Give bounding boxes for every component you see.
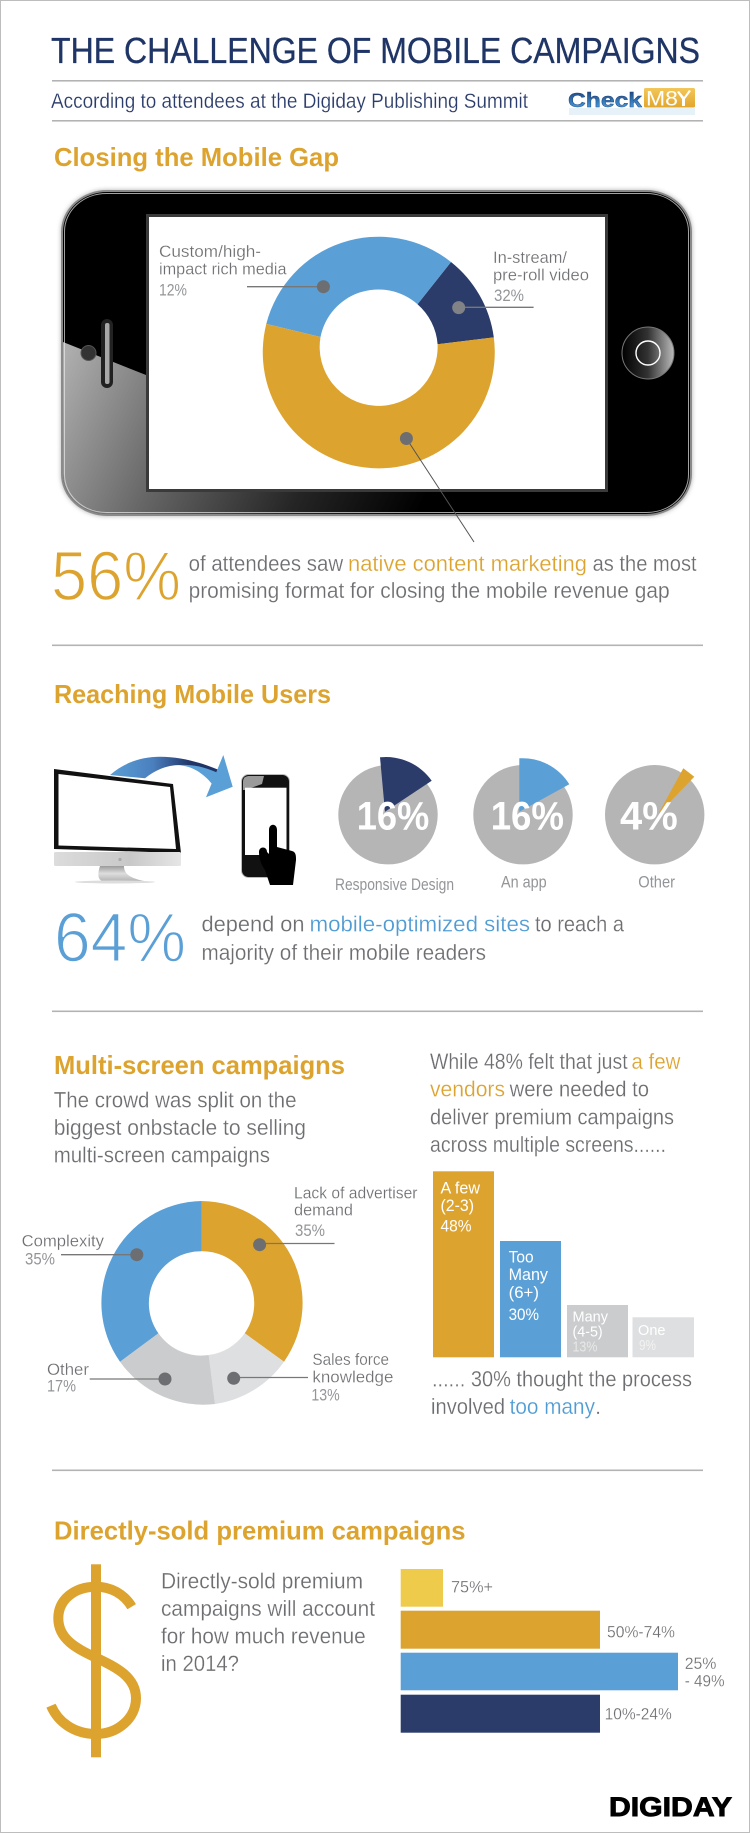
bar: 25%-49%: - 49%	[685, 1672, 725, 1691]
text: crowd was split	[54, 1088, 306, 1168]
bar: too many	[500, 1241, 561, 1357]
text: 48% a few vendors: a few	[632, 1049, 680, 1074]
bar: too many: (6+)	[509, 1283, 539, 1302]
label: custom rich media	[159, 242, 287, 300]
label: complexity: Complexity	[22, 1232, 104, 1251]
bar: 25%-49%: 25%	[685, 1654, 716, 1673]
label: custom rich media: Custom/high-	[159, 242, 261, 261]
phone speaker	[101, 319, 113, 388]
logo: CheckM8: M8	[646, 88, 678, 110]
pie: other 4%	[605, 765, 704, 891]
label: lack of advertiser demand: demand	[294, 1201, 353, 1220]
label: complexity: 35%	[25, 1249, 55, 1268]
bar: a few: A few	[440, 1178, 481, 1197]
stat: 56% native content: as the most	[593, 551, 697, 576]
text: 48% a few vendors: were needed to	[509, 1077, 649, 1102]
text: revenue question	[161, 1568, 375, 1676]
text: 30% too many: involved	[431, 1394, 505, 1419]
bar: 10%-24%: 10%-24%	[605, 1704, 672, 1723]
text: 48% a few vendors: deliver premium campaigns	[430, 1104, 674, 1129]
bar chart: premium revenue share	[401, 1569, 725, 1733]
label: in-stream video: pre-roll video	[493, 266, 589, 285]
label: custom rich media: 12%	[159, 280, 187, 300]
bar: many	[567, 1305, 628, 1357]
subtitle: According to attendees at the Digiday Publishing Summit	[51, 90, 528, 113]
label: lack of advertiser demand	[294, 1183, 418, 1240]
text: revenue question: campaigns will account	[161, 1596, 375, 1621]
bar: many: (4-5)	[572, 1324, 603, 1341]
pie: responsive design 16%: 16%	[357, 794, 429, 838]
logo: CheckM8: Check	[568, 90, 643, 112]
bar: too many: Many	[509, 1265, 548, 1284]
heading: Reaching Mobile Users: Reaching Mobile Users	[54, 679, 331, 709]
stat: 64% mobile-optimized: to reach a	[535, 912, 625, 937]
pie: other 4%: Other	[638, 872, 675, 891]
bar: 10%-24%	[401, 1695, 672, 1733]
pie: responsive design 16%	[335, 757, 454, 894]
panel: phone with donut chart	[61, 190, 692, 542]
label: other	[47, 1360, 89, 1396]
bar: many: 13%	[572, 1339, 597, 1356]
heading: Closing the Mobile Gap: Closing the Mobile Gap	[54, 142, 339, 172]
stat: 56% native content: of attendees saw	[189, 551, 343, 576]
text: 48% a few vendors: While 48% felt that just	[430, 1049, 628, 1074]
pie: other 4%: 4%	[620, 794, 678, 838]
donut chart: obstacles	[61, 1201, 334, 1405]
icon: smartphone with hand	[242, 774, 296, 885]
label: in-stream video: In-stream/	[493, 248, 567, 267]
stat: 56% native content: promising format for closing the mobile revenue gap	[189, 578, 670, 603]
label: in-stream video: 32%	[494, 286, 524, 305]
bar: one: One	[638, 1322, 666, 1339]
bar: 75%+: 75%+	[451, 1578, 493, 1597]
label: other: 17%	[47, 1377, 76, 1396]
stat: 56% native content: 56%	[51, 537, 181, 615]
bar: 25%-49%	[401, 1653, 725, 1691]
bar chart: number of vendors	[433, 1171, 694, 1357]
heading: Multi-screen campaigns: Multi-screen campaigns	[54, 1050, 345, 1080]
pie: an app 16%: 16%	[491, 794, 564, 838]
text: 48% a few vendors	[430, 1049, 680, 1157]
bar: one: 9%	[639, 1337, 656, 1354]
text: 30% too many: .	[595, 1394, 601, 1419]
arrow: desktop to mobile	[110, 755, 233, 797]
bar: one	[632, 1317, 694, 1357]
text: crowd was split: multi-screen campaigns	[54, 1143, 270, 1168]
pie: an app 16%	[473, 758, 573, 891]
pie: an app 16%: An app	[501, 872, 547, 891]
label: sales force knowledge: 13%	[311, 1386, 340, 1405]
heading: Directly-sold premium campaigns: Directly-sold premium campaigns	[54, 1515, 466, 1545]
label: custom rich media: impact rich media	[159, 260, 287, 278]
text: 30% too many	[431, 1367, 692, 1419]
label: sales force knowledge	[311, 1350, 393, 1405]
bar: too many: Too	[509, 1248, 534, 1267]
label: lack of advertiser demand: 35%	[295, 1221, 325, 1240]
label: in-stream video	[493, 248, 589, 305]
bar: 75%+	[401, 1569, 493, 1607]
stat: 64% mobile-optimized: 64%	[54, 899, 186, 977]
stat: 56% native content	[51, 537, 697, 615]
donut chart: mobile gap	[247, 237, 534, 542]
logo: CheckM8	[568, 88, 695, 115]
label: sales force knowledge: knowledge	[312, 1368, 393, 1387]
text: 48% a few vendors: across multiple screens......	[430, 1132, 666, 1157]
label: sales force knowledge: Sales force	[312, 1350, 389, 1369]
stat: 64% mobile-optimized: depend on	[202, 912, 304, 937]
stat: 64% mobile-optimized: majority of their mobile readers	[202, 940, 486, 965]
label: lack of advertiser demand: Lack of advertiser	[294, 1183, 418, 1202]
bar: many: Many	[572, 1309, 608, 1326]
bar: a few: 48%	[440, 1217, 472, 1236]
stat: 56% native content: native content marketing	[348, 551, 587, 576]
bar: 50%-74%	[401, 1611, 675, 1649]
text: revenue question: for how much revenue	[161, 1623, 366, 1648]
text: 30% too many: ...... 30% thought the process	[432, 1367, 692, 1392]
logo: Digiday: DIGIDAY	[609, 1792, 732, 1822]
bar: a few: (2-3)	[440, 1196, 474, 1215]
icon: dollar sign	[51, 1564, 136, 1757]
text: revenue question: Directly-sold premium	[161, 1568, 363, 1593]
phone home button	[622, 327, 674, 379]
icon: desktop monitor	[54, 769, 181, 884]
pie: responsive design 16%: Responsive Design	[335, 875, 454, 894]
text: revenue question: in 2014?	[161, 1651, 239, 1676]
bar: 50%-74%: 50%-74%	[607, 1622, 675, 1641]
phone screen	[148, 216, 606, 490]
stat: 64% mobile-optimized: mobile-optimized sites	[310, 912, 530, 937]
text: 48% a few vendors: vendors	[430, 1077, 505, 1102]
label: other: Other	[47, 1360, 89, 1379]
phone camera	[81, 346, 96, 360]
text: crowd was split: biggest onbstacle to selling	[54, 1115, 306, 1140]
stat: 64% mobile-optimized	[54, 899, 625, 977]
bar: a few	[433, 1171, 494, 1357]
label: complexity	[22, 1232, 104, 1268]
text: crowd was split: The crowd was split on the	[54, 1088, 297, 1113]
text: 30% too many: too many	[510, 1394, 595, 1419]
bar: too many: 30%	[509, 1305, 539, 1324]
